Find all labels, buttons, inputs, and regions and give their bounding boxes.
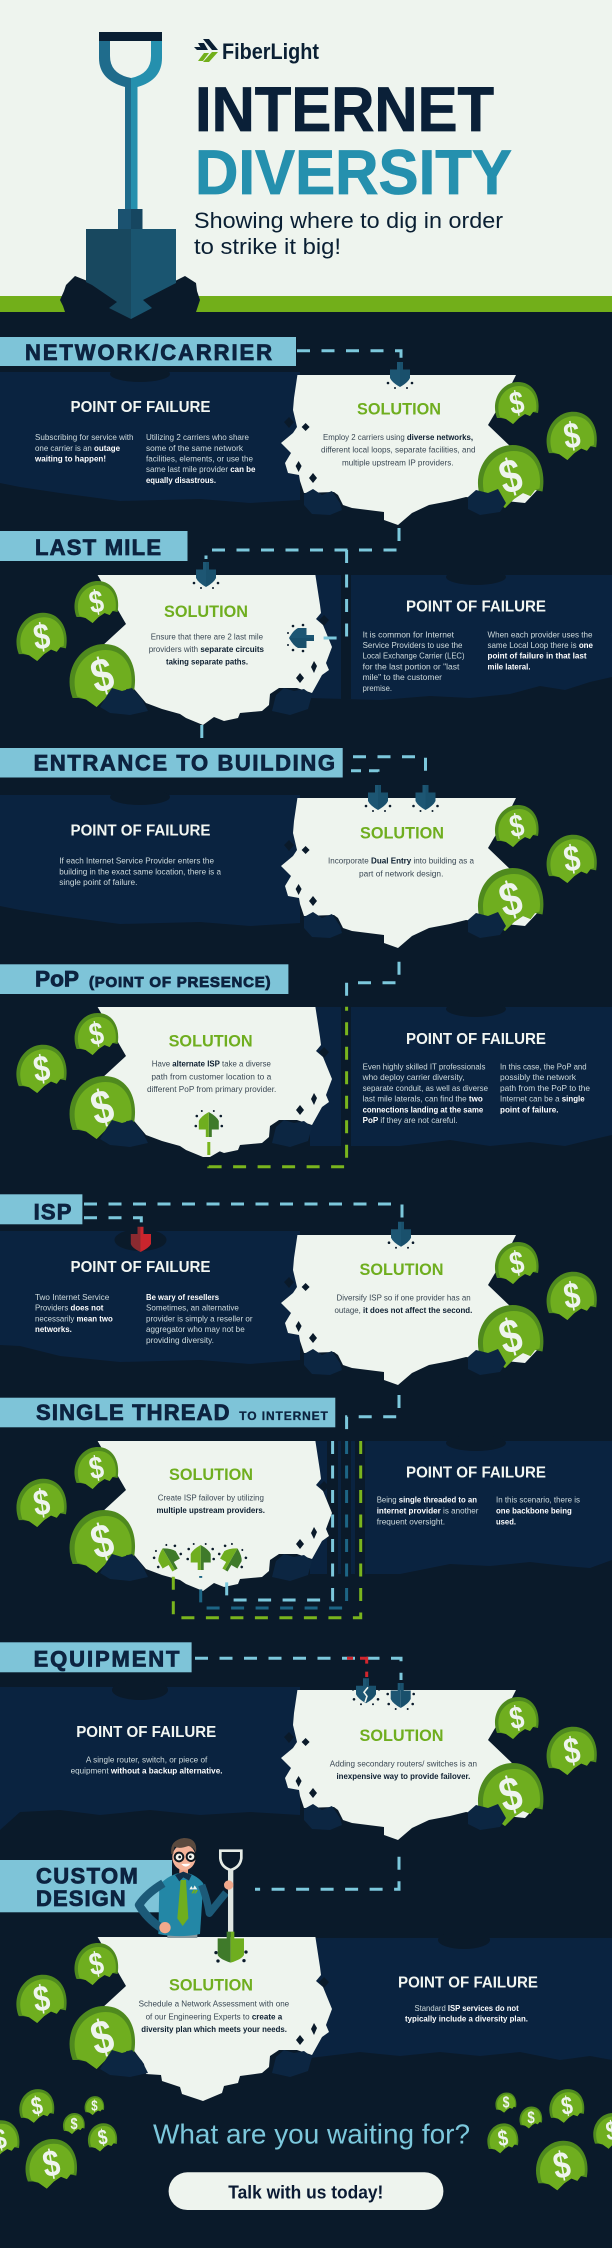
heading: solution: SOLUTION bbox=[360, 1726, 444, 1745]
text: point of failure copy: single point of failure. bbox=[59, 877, 137, 887]
panel: solution: $ bbox=[86, 2010, 119, 2066]
tag: last mile: LAST MILE bbox=[35, 535, 161, 560]
panel: solution: $ bbox=[31, 616, 53, 659]
tag: network/carrier: NETWORK/CARRIER bbox=[25, 340, 272, 365]
text: point of failure copy: provider is simply a reseller or bbox=[146, 1313, 253, 1323]
text: solution copy: multiple upstream IP providers. bbox=[342, 457, 454, 467]
panel: solution: $ bbox=[507, 1700, 527, 1737]
text: solution copy: multiple upstream providers. bbox=[156, 1505, 265, 1515]
tag: entrance to building: ENTRANCE TO BUILDING bbox=[34, 750, 335, 776]
heading: point of failure: POINT OF FAILURE bbox=[398, 1975, 538, 1992]
text: point of failure copy: used. bbox=[496, 1516, 516, 1526]
text: solution copy: providers with separate circuits bbox=[149, 644, 264, 654]
text: solution copy bbox=[321, 432, 476, 467]
text: point of failure copy: one backbone being bbox=[496, 1505, 572, 1515]
tag: pop: PoP bbox=[35, 967, 79, 992]
footer coins left bbox=[0, 2089, 117, 2189]
arrow: dashed path bbox=[202, 725, 426, 778]
text: point of failure copy: aggregator who may not be bbox=[146, 1324, 245, 1334]
text: point of failure copy bbox=[362, 1061, 590, 1125]
text: solution copy: path from customer location to a bbox=[151, 1071, 272, 1081]
text: point of failure copy: typically include a diversity plan. bbox=[405, 2014, 528, 2024]
text: point of failure copy: premise. bbox=[363, 683, 392, 693]
text: point of failure copy: possibly the network bbox=[500, 1072, 577, 1082]
logo: FiberLight: FiberLight bbox=[222, 39, 320, 64]
text: point of failure copy: connections landing at the same bbox=[363, 1104, 483, 1114]
panel: solution bbox=[16, 1937, 332, 2101]
button: talk with us today bbox=[169, 2172, 443, 2210]
heading: point of failure: POINT OF FAILURE bbox=[70, 822, 211, 839]
text: point of failure copy: When each provider uses the bbox=[488, 629, 593, 639]
footer coins left: $ bbox=[70, 2116, 78, 2133]
text: point of failure copy: If each Internet Service Provider enters the bbox=[59, 855, 214, 865]
arrow: dashed path bbox=[297, 351, 401, 358]
text: point of failure copy bbox=[59, 855, 221, 887]
panel: solution: $ bbox=[494, 1309, 527, 1365]
heading: solution: SOLUTION bbox=[169, 1975, 253, 1994]
text: point of failure copy: equally disastrous. bbox=[146, 475, 216, 485]
tag: last mile bbox=[0, 531, 188, 561]
text: solution copy bbox=[334, 1292, 472, 1315]
text: point of failure copy: It is common for Internet bbox=[363, 629, 455, 639]
footer coins left: $ bbox=[96, 2126, 109, 2150]
text: point of failure copy: equipment without a backup alternative. bbox=[71, 1765, 222, 1775]
tag: isp: ISP bbox=[34, 1199, 71, 1224]
title bbox=[195, 75, 512, 208]
panel: solution: $ bbox=[86, 1514, 119, 1570]
icon: shovel one bbox=[364, 785, 392, 812]
text: point of failure copy: necessarily mean two bbox=[35, 1313, 113, 1323]
text: solution copy bbox=[328, 856, 474, 878]
panel: solution bbox=[281, 1235, 597, 1385]
text: point of failure copy: providing diversity. bbox=[146, 1335, 214, 1345]
panel: solution: $ bbox=[86, 1946, 107, 1983]
text: solution copy bbox=[156, 1492, 265, 1515]
heading: point of failure: POINT OF FAILURE bbox=[70, 399, 211, 416]
text: point of failure copy: same Local Loop there is one bbox=[488, 640, 593, 650]
heading: solution: SOLUTION bbox=[169, 1465, 253, 1484]
subtitle bbox=[194, 208, 503, 259]
text: solution copy: Create ISP failover by utilizing bbox=[158, 1492, 264, 1502]
heading: solution: SOLUTION bbox=[164, 602, 248, 621]
footer coins left: $ bbox=[91, 2097, 98, 2114]
section: last mile bbox=[0, 528, 612, 725]
panel: solution: $ bbox=[561, 415, 583, 458]
panel: point of failure bbox=[0, 1680, 300, 1830]
text: point of failure copy: Be wary of resellers bbox=[146, 1292, 219, 1302]
text: solution copy: part of network design. bbox=[359, 868, 443, 878]
section: equipment bbox=[0, 1642, 597, 1840]
text: point of failure copy: building in the exact same location, there is a bbox=[59, 866, 221, 876]
icon: three green shovels bbox=[149, 1539, 251, 1577]
text: solution copy: different local loops, separate facilities, and bbox=[321, 445, 476, 455]
icon: shovel bbox=[386, 362, 414, 389]
icon: shovel bbox=[387, 1222, 415, 1249]
tag: single thread bbox=[0, 1398, 335, 1427]
text: solution copy: of our Engineering Experts to create a bbox=[146, 2012, 282, 2022]
panel: solution bbox=[16, 575, 332, 725]
tag: pop: (POINT OF PRESENCE) bbox=[89, 974, 270, 991]
text: solution copy: Incorporate Dual Entry into building as a bbox=[328, 856, 474, 866]
footer coins right: $ bbox=[527, 2109, 535, 2127]
panel: solution: $ bbox=[86, 648, 119, 704]
text: solution copy: diversity plan which meets your needs. bbox=[141, 2024, 287, 2034]
text: point of failure copy: path from the PoP to the bbox=[500, 1083, 590, 1093]
text: point of failure copy: mile" to the customer bbox=[363, 672, 442, 682]
text: solution copy: Employ 2 carriers using diverse networks, bbox=[323, 432, 473, 442]
footer coins right: $ bbox=[550, 2144, 574, 2188]
text: point of failure copy: In this case, the PoP and bbox=[500, 1061, 587, 1071]
tag: isp bbox=[0, 1194, 82, 1224]
icon: red shovel bbox=[114, 1227, 166, 1252]
panel: solution: $ bbox=[561, 1730, 583, 1773]
icon: shovel bbox=[386, 1683, 415, 1710]
panel: solution: $ bbox=[86, 1450, 107, 1487]
panel: solution: $ bbox=[31, 1978, 53, 2021]
text: solution copy bbox=[330, 1758, 477, 1781]
subtitle: to strike it big! bbox=[194, 234, 341, 259]
text: point of failure copy: frequent oversight. bbox=[377, 1516, 445, 1526]
text: solution copy: Schedule a Network Assessment with one bbox=[139, 1999, 289, 2009]
heading: solution: SOLUTION bbox=[360, 824, 444, 843]
panel: solution: $ bbox=[561, 838, 583, 881]
text: point of failure copy: mile lateral. bbox=[488, 661, 530, 671]
section: custom design bbox=[0, 1838, 612, 2101]
footer coins left: $ bbox=[29, 2090, 45, 2121]
footer coins right: $ bbox=[503, 2093, 510, 2111]
text: point of failure copy bbox=[71, 1755, 222, 1775]
text: point of failure copy bbox=[363, 629, 593, 693]
text: solution copy: outage, it does not affect the second. bbox=[334, 1305, 472, 1315]
text: point of failure copy: Service Providers to use the bbox=[363, 640, 463, 650]
text: solution copy: Have alternate ISP take a diverse bbox=[152, 1059, 271, 1069]
icon: green shovel bbox=[194, 1110, 223, 1137]
text: point of failure copy: Providers does not bbox=[35, 1303, 104, 1313]
panel: solution: $ bbox=[494, 449, 527, 505]
panel: solution: $ bbox=[494, 1767, 527, 1823]
text: point of failure copy: Standard ISP services do not bbox=[414, 2003, 519, 2013]
footer coins left: $ bbox=[39, 2142, 63, 2186]
text: solution copy: Ensure that there are 2 last mile bbox=[151, 631, 263, 641]
panel: solution bbox=[281, 375, 597, 525]
text: point of failure copy: Internet can be a single bbox=[500, 1094, 585, 1104]
text: solution copy bbox=[149, 631, 264, 667]
text: point of failure copy: facilities, elements, or use the bbox=[146, 454, 253, 464]
heading: point of failure: POINT OF FAILURE bbox=[406, 599, 546, 616]
text: point of failure copy: Subscribing for service with bbox=[35, 432, 134, 442]
text: point of failure copy: waiting to happen! bbox=[34, 454, 106, 464]
call to action heading: What are you waiting for? bbox=[153, 2118, 470, 2149]
panel: solution: $ bbox=[86, 584, 107, 621]
header bbox=[0, 0, 612, 342]
text: point of failure copy: Even highly skilled IT professionals bbox=[363, 1061, 486, 1071]
title: INTERNET bbox=[195, 75, 494, 145]
text: point of failure copy: for the last portion or "last bbox=[363, 661, 460, 671]
arrow: dashed path bbox=[195, 1658, 401, 1680]
illustration: engineer with shovel bbox=[139, 1838, 248, 1963]
panel: solution bbox=[16, 1441, 332, 1591]
text: solution copy: Diversify ISP so if one provider has an bbox=[336, 1292, 471, 1302]
panel: solution: $ bbox=[494, 872, 527, 928]
panel: solution: $ bbox=[86, 1080, 119, 1136]
text: point of failure copy: separate conduit, as well as diverse bbox=[363, 1083, 488, 1093]
icon: shovel side bbox=[287, 624, 314, 652]
text: point of failure copy: Being single threaded to an bbox=[377, 1495, 477, 1505]
panel: solution: $ bbox=[561, 1275, 583, 1318]
text: solution copy bbox=[147, 1059, 276, 1094]
arrow: dashed path bbox=[209, 962, 399, 1167]
text: solution copy: inexpensive way to provide failover. bbox=[336, 1771, 470, 1781]
panel: solution bbox=[281, 798, 597, 948]
panel: point of failure bbox=[0, 789, 300, 926]
section: pop bbox=[0, 962, 612, 1167]
panel: solution: $ bbox=[507, 808, 527, 845]
panel: solution: $ bbox=[507, 385, 527, 422]
text: point of failure copy bbox=[35, 1292, 253, 1345]
text: point of failure copy: one carrier is an outage bbox=[35, 443, 120, 453]
section: entrance to building bbox=[0, 725, 597, 948]
text: solution copy: taking separate paths. bbox=[166, 657, 248, 667]
footer coins right: $ bbox=[496, 2125, 510, 2152]
panel: solution: $ bbox=[31, 1482, 53, 1525]
text: point of failure copy bbox=[405, 2003, 528, 2024]
section: single thread bbox=[0, 1395, 612, 1618]
heading: solution: SOLUTION bbox=[169, 1031, 253, 1050]
text: point of failure copy bbox=[34, 432, 256, 485]
icon: shovel top bbox=[192, 562, 220, 589]
arrow: dashed path bbox=[206, 528, 399, 638]
text: point of failure copy: last mile laterals, can find the two bbox=[363, 1094, 483, 1104]
panel: point of failure bbox=[310, 1435, 612, 1575]
text: point of failure copy: Sometimes, an alternative bbox=[146, 1303, 239, 1313]
panel: point of failure bbox=[310, 1001, 612, 1147]
text: point of failure copy: Local Exchange Carrier (LEC) bbox=[363, 651, 465, 661]
arrow: dashed paths bbox=[173, 1395, 399, 1618]
text: point of failure copy: A single router, switch, or piece of bbox=[86, 1755, 208, 1765]
footer coins right bbox=[487, 2089, 612, 2190]
tag: equipment: EQUIPMENT bbox=[34, 1647, 180, 1672]
text: point of failure copy: internet provider is another bbox=[377, 1505, 479, 1515]
panel: solution bbox=[16, 1007, 332, 1157]
icon: large shovel bbox=[60, 32, 200, 319]
panel: point of failure bbox=[310, 569, 612, 700]
subtitle: Showing where to dig in order bbox=[194, 208, 503, 233]
tag: custom design bbox=[0, 1860, 172, 1912]
heading: solution: SOLUTION bbox=[357, 400, 441, 419]
text: point of failure copy: some of the same network bbox=[146, 443, 244, 453]
text: point of failure copy: Two Internet Service bbox=[35, 1292, 109, 1302]
panel: solution: $ bbox=[86, 1016, 107, 1053]
arrow: dashed path bbox=[84, 1204, 402, 1224]
text: point of failure copy bbox=[377, 1495, 580, 1526]
heading: point of failure: POINT OF FAILURE bbox=[406, 1031, 546, 1048]
tag: equipment bbox=[0, 1642, 192, 1672]
heading: point of failure: POINT OF FAILURE bbox=[70, 1259, 211, 1276]
icon: broken shovel bbox=[352, 1678, 380, 1705]
text: point of failure copy: point of failure in that last bbox=[488, 651, 587, 661]
section: network/carrier bbox=[0, 337, 597, 525]
heading: point of failure: POINT OF FAILURE bbox=[406, 1464, 546, 1481]
tag: single thread: SINGLE THREAD bbox=[36, 1400, 230, 1425]
tag: single thread: TO INTERNET bbox=[239, 1409, 329, 1423]
button: talk with us today: Talk with us today! bbox=[228, 2182, 383, 2202]
panel: solution: $ bbox=[507, 1245, 527, 1282]
text: solution copy: Adding secondary routers/ switches is an bbox=[330, 1758, 477, 1768]
panel: solution bbox=[281, 1690, 597, 1840]
text: solution copy bbox=[139, 1999, 289, 2034]
text: point of failure copy: who deploy carrier diversity, bbox=[362, 1072, 464, 1082]
panel: point of failure bbox=[0, 1231, 300, 1364]
text: point of failure copy: networks. bbox=[35, 1324, 72, 1334]
arrow: dashed path bbox=[255, 1857, 399, 1889]
icon: shovel two bbox=[411, 785, 440, 812]
text: point of failure copy: point of failure. bbox=[500, 1104, 558, 1114]
text: point of failure copy: Utilizing 2 carriers who share bbox=[146, 432, 249, 442]
text: point of failure copy: In this scenario, there is bbox=[496, 1495, 580, 1505]
panel: solution: $ bbox=[31, 1048, 53, 1091]
title: DIVERSITY bbox=[195, 138, 512, 208]
tag: custom design: DESIGN bbox=[36, 1886, 126, 1911]
text: solution copy: different PoP from primary provider. bbox=[147, 1084, 276, 1094]
footer coins right: $ bbox=[559, 2091, 575, 2121]
section: isp bbox=[0, 1194, 597, 1385]
heading: point of failure: POINT OF FAILURE bbox=[76, 1724, 217, 1741]
panel: point of failure bbox=[310, 1931, 612, 2060]
tag: pop bbox=[0, 964, 288, 994]
text: point of failure copy: PoP if they are not careful. bbox=[363, 1115, 458, 1125]
tag: custom design: CUSTOM bbox=[36, 1863, 138, 1888]
panel: point of failure bbox=[0, 366, 300, 503]
text: point of failure copy: same last mile provider can be bbox=[146, 464, 256, 474]
heading: solution: SOLUTION bbox=[360, 1260, 444, 1279]
